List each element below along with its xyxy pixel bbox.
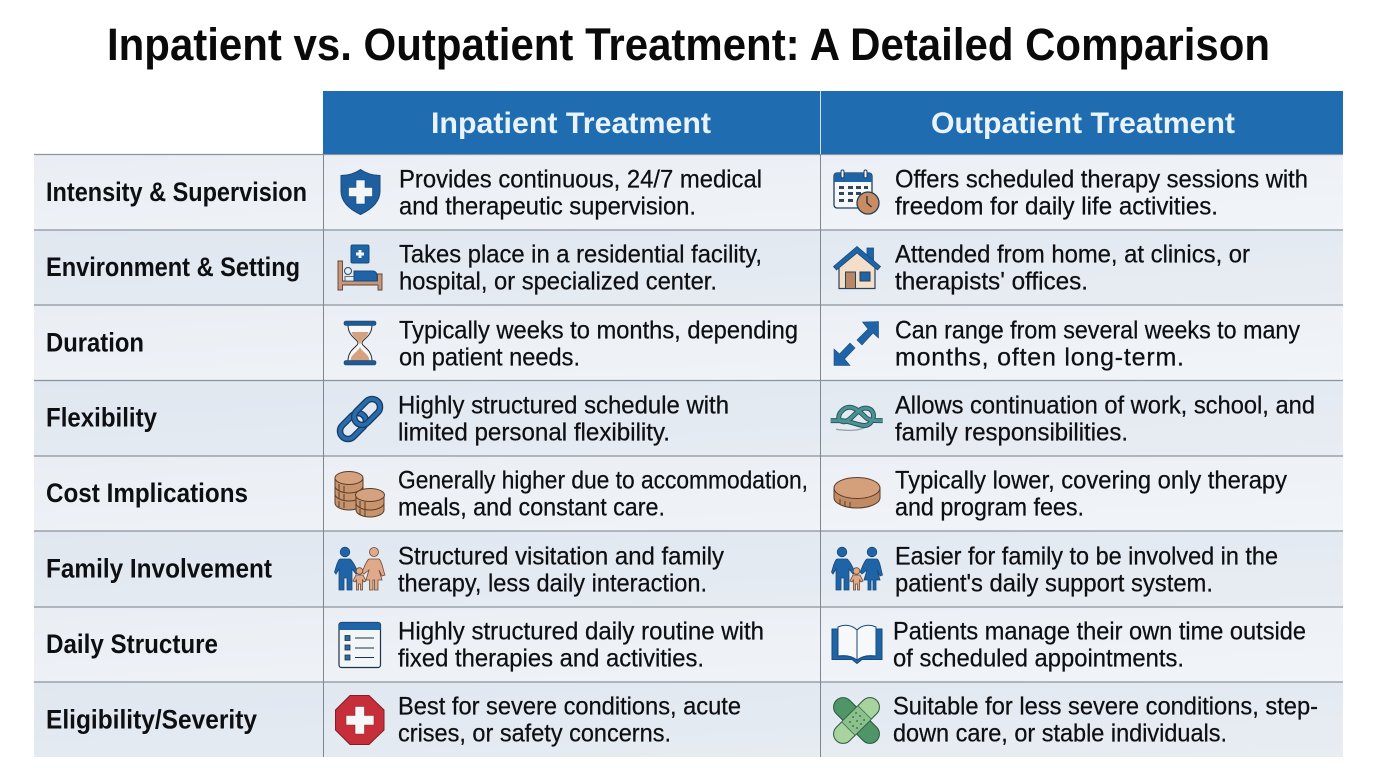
row label: Intensity & Supervision	[46, 177, 307, 207]
inpatient text: Provides continuous, 24/7 medical	[399, 166, 762, 194]
header: column titles	[323, 91, 1343, 154]
icon: chain links	[337, 396, 383, 442]
inpatient text: Generally higher due to accommodation,	[398, 466, 808, 494]
icon: schedule list	[339, 622, 380, 668]
inpatient text line 2: hospital, or specialized center.	[399, 268, 717, 296]
header: Inpatient Treatment: Inpatient Treatment	[431, 107, 711, 140]
icon: hospital bed	[338, 245, 382, 290]
inpatient text: Typically weeks to months, depending	[399, 316, 798, 344]
header: Outpatient Treatment: Outpatient Treatment	[931, 107, 1235, 140]
inpatient text line 2: and therapeutic supervision.	[399, 192, 696, 220]
row label: Cost Implications	[46, 478, 248, 508]
inpatient text: Takes place in a residential facility,	[399, 240, 762, 268]
outpatient text line 2: family responsibilities.	[895, 418, 1128, 446]
row label: Duration	[46, 328, 144, 358]
icon: crossed bandages	[830, 694, 883, 747]
row: Eligibility/Severity	[46, 692, 1318, 748]
outpatient text line 2: of scheduled appointments.	[893, 644, 1184, 672]
row label: Daily Structure	[46, 629, 218, 659]
row: Environment & Setting	[46, 240, 1250, 296]
row: Flexibility	[46, 392, 1315, 446]
row: Daily Structure	[46, 618, 1306, 672]
inpatient text: Highly structured schedule with	[398, 392, 729, 420]
row label: Flexibility	[46, 402, 157, 432]
outpatient text: Suitable for less severe conditions, step-	[893, 692, 1318, 720]
icon: knot	[831, 407, 883, 430]
row: Cost Implications	[46, 466, 1287, 522]
outpatient text: Can range from several weeks to many	[895, 316, 1300, 344]
inpatient text line 2: therapy, less daily interaction.	[398, 570, 707, 598]
outpatient text: Easier for family to be involved in the	[895, 542, 1278, 570]
outpatient text: Allows continuation of work, school, and	[895, 392, 1315, 420]
outpatient text: Patients manage their own time outside	[893, 618, 1306, 646]
outpatient text: Typically lower, covering only therapy	[895, 466, 1287, 494]
table background rows	[34, 154, 1343, 757]
inpatient text line 2: meals, and constant care.	[398, 494, 665, 522]
outpatient text line 2: patient's daily support system.	[895, 570, 1213, 598]
row label: Family Involvement	[46, 554, 272, 584]
icon: open book	[832, 625, 882, 664]
row label: Eligibility/Severity	[46, 704, 257, 734]
outpatient text: Attended from home, at clinics, or	[895, 240, 1250, 268]
inpatient text line 2: fixed therapies and activities.	[398, 644, 704, 672]
row label: Environment & Setting	[46, 252, 300, 282]
inpatient text line 2: crises, or safety concerns.	[398, 720, 671, 748]
icon: diagonal arrows	[834, 322, 878, 366]
icon: hourglass	[344, 321, 376, 365]
icon: single coin	[834, 478, 880, 508]
inpatient text line 2: on patient needs.	[399, 344, 580, 372]
outpatient text line 2: months, often long-term.	[895, 344, 1184, 372]
outpatient text line 2: down care, or stable individuals.	[893, 720, 1227, 748]
icon: coin stacks	[335, 472, 384, 517]
outpatient text line 2: and program fees.	[895, 494, 1084, 522]
inpatient text: Highly structured daily routine with	[398, 618, 764, 646]
icon: calendar with clock	[834, 170, 879, 214]
inpatient text: Best for severe conditions, acute	[398, 692, 741, 720]
icon: family, blue parents and tan child	[832, 547, 882, 590]
icon: red octagon with cross	[336, 696, 384, 744]
icon: house	[834, 246, 880, 288]
icon: shield with cross	[341, 170, 380, 214]
inpatient text: Structured visitation and family	[398, 542, 724, 570]
outpatient text: Offers scheduled therapy sessions with	[895, 166, 1308, 194]
row: Family Involvement	[46, 542, 1278, 598]
row: Duration	[46, 316, 1300, 372]
title: Inpatient vs. Outpatient Treatment: A Detailed Comparison	[107, 19, 1270, 70]
outpatient text line 2: therapists' offices.	[895, 268, 1088, 296]
icon: family, blue father and tan mother	[334, 547, 385, 590]
row: Intensity & Supervision	[46, 166, 1308, 220]
outpatient text line 2: freedom for daily life activities.	[895, 192, 1218, 220]
inpatient text line 2: limited personal flexibility.	[398, 418, 670, 446]
